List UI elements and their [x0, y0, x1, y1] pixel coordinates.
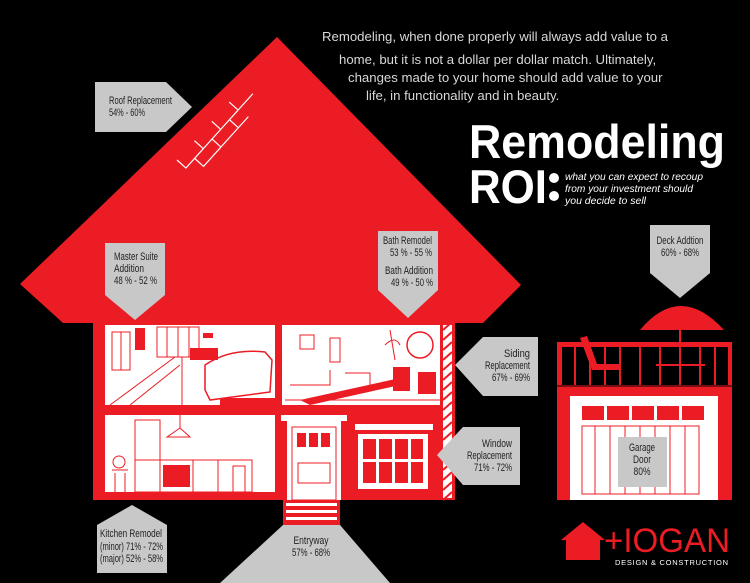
callout: garage door: 80%	[634, 466, 651, 478]
callout: kitchen: Kitchen Remodel	[100, 528, 162, 540]
callout: entryway	[220, 525, 390, 583]
callout: garage door	[618, 437, 667, 487]
callout: siding: Siding	[504, 348, 530, 360]
logo: DESIGN & CONSTRUCTION	[615, 558, 728, 567]
house body	[93, 322, 455, 500]
callout: siding: Replacement	[485, 360, 530, 372]
callout: bath	[378, 231, 438, 318]
logo: +IOGAN	[604, 522, 730, 560]
callout: bath: 53 % - 55 %	[390, 247, 432, 259]
callout: roof replacement: 54% - 60%	[109, 107, 145, 119]
callout: siding	[455, 337, 538, 396]
callout: master suite: Master Suite	[114, 251, 158, 263]
garage with deck	[557, 306, 732, 500]
logo	[561, 522, 730, 567]
intro paragraph: life, in functionality and in beauty.	[366, 88, 559, 103]
callout: bath: Bath Remodel	[383, 235, 432, 247]
title: you decide to sell	[564, 196, 647, 207]
callout: deck: 60% - 68%	[661, 247, 699, 259]
title: ROI	[469, 160, 547, 213]
callout: entryway: 57% - 68%	[292, 547, 330, 559]
intro paragraph: changes made to your home should add value to your	[348, 70, 663, 85]
room: kitchen	[105, 414, 275, 492]
callout: kitchen: (major) 52% - 58%	[100, 553, 163, 565]
callout: siding: 67% - 69%	[492, 372, 530, 384]
title: what you can expect to recoup	[565, 172, 703, 183]
window	[355, 424, 433, 489]
callout: kitchen	[97, 505, 167, 573]
callout: bath: Bath Addition	[385, 265, 433, 277]
callout: window: Window	[482, 438, 512, 450]
room: bathroom	[282, 325, 440, 405]
callout: entryway: Entryway	[294, 535, 329, 547]
steps	[283, 500, 340, 525]
room: bedroom	[105, 325, 275, 405]
callout: deck: Deck Addtion	[656, 235, 704, 247]
callout: roof replacement	[95, 82, 192, 132]
callout: kitchen: (minor) 71% - 72%	[100, 541, 163, 553]
intro paragraph	[322, 29, 669, 103]
callout: master suite: 48 % - 52 %	[114, 275, 157, 287]
callout: window	[437, 427, 520, 485]
callout: roof replacement: Roof Replacement	[109, 95, 172, 107]
intro paragraph: Remodeling, when done properly will always add value to a	[322, 29, 669, 44]
callout: master suite	[105, 243, 165, 320]
title: from your investment should	[565, 184, 693, 195]
callout: master suite: Addition	[114, 263, 144, 275]
callout: window: Replacement	[467, 450, 512, 462]
callout: bath: 49 % - 50 %	[391, 277, 433, 289]
icon: roof shingles	[177, 86, 262, 176]
callout: window: 71% - 72%	[474, 462, 512, 474]
callout: garage door: Door	[633, 454, 651, 466]
intro paragraph: home, but it is not a dollar per dollar match. Ultimately,	[339, 52, 656, 67]
roof	[20, 37, 521, 323]
callout: garage door: Garage	[629, 442, 655, 454]
callout: deck	[650, 225, 710, 298]
door	[281, 415, 347, 500]
title	[469, 115, 725, 213]
title: Remodeling	[469, 115, 725, 168]
